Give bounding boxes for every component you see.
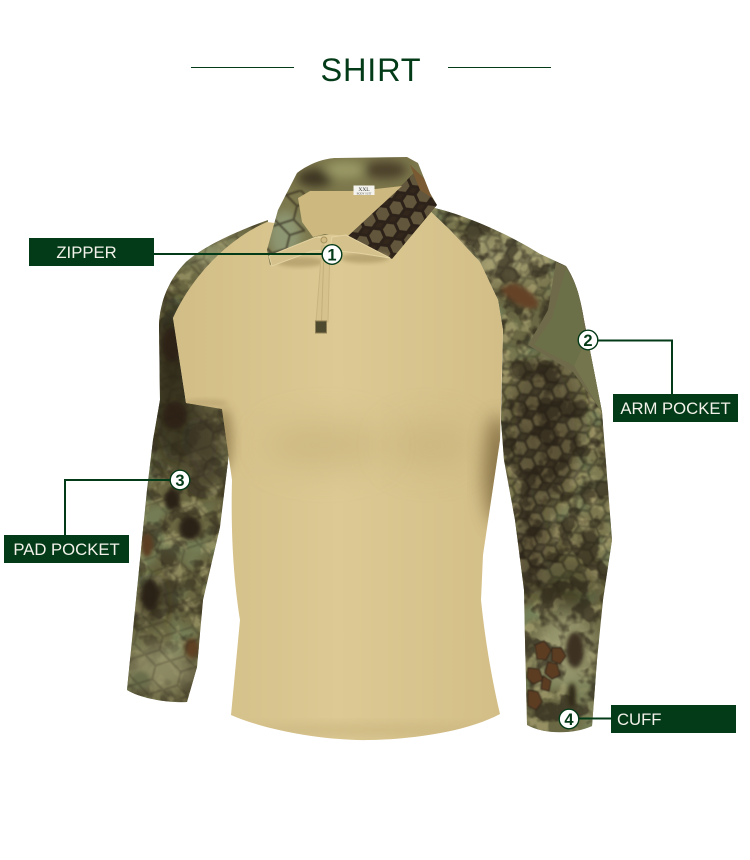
callout 2: arm pocket: 2	[583, 332, 593, 350]
callout 1: zipper	[29, 238, 342, 266]
callout 2: arm pocket	[578, 330, 738, 422]
arm pocket	[528, 262, 603, 414]
back collar and lapels	[267, 157, 437, 265]
callout 4: cuff: 4	[564, 711, 574, 729]
callout 4: cuff: CUFF	[617, 710, 662, 729]
size label: XXL	[358, 187, 370, 193]
callout 4: cuff	[559, 705, 736, 733]
callout 3: pad pocket	[4, 470, 190, 563]
title: SHIRT	[321, 52, 421, 88]
callout 3: pad pocket: 3	[175, 472, 185, 490]
right sleeve	[431, 208, 612, 732]
illustration: camouflage combat shirt	[110, 150, 630, 740]
collar front flaps	[269, 235, 390, 267]
callout 1: zipper: ZIPPER	[56, 243, 117, 262]
callout 1: zipper: 1	[327, 246, 337, 264]
inner neck	[298, 186, 402, 237]
zipper placket	[316, 237, 330, 333]
size label: BODY SUIT	[357, 192, 372, 196]
callout 3: pad pocket: PAD POCKET	[13, 540, 120, 559]
callout 2: arm pocket: ARM POCKET	[620, 399, 731, 418]
torso shading	[183, 399, 512, 736]
size label	[354, 186, 374, 196]
left sleeve	[127, 220, 268, 702]
torso	[173, 206, 503, 740]
